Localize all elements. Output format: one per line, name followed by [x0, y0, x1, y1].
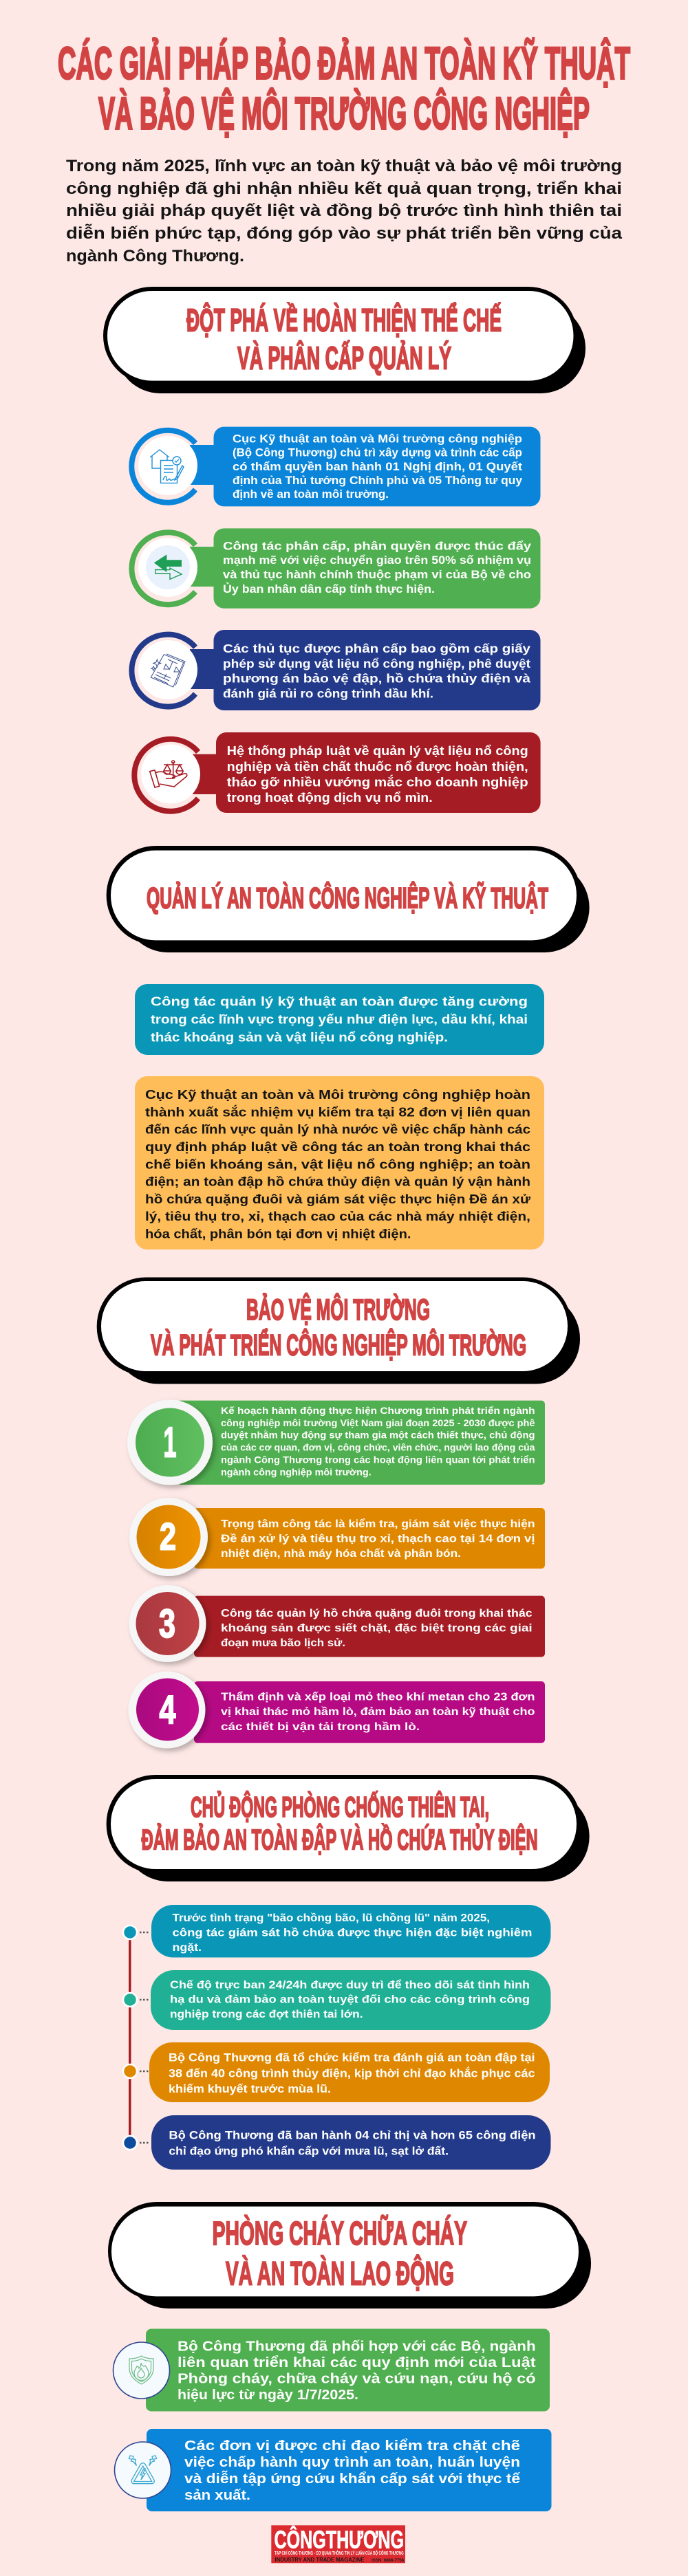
panel: legal drafting card: có thẩm quyền ban hành 01 Nghị định, 01 Quyết — [233, 460, 522, 473]
icon: legal document with scales — [151, 654, 185, 687]
panel: fire law card: Bộ Công Thương đã phối hợp với các Bộ, ngành — [178, 2339, 536, 2355]
panel: explosives law card: Hệ thống pháp luật về quản lý vật liệu nổ công — [227, 744, 528, 758]
panel: timeline item 2: nghiệp trong các đợt thiên tai lớn. — [170, 2009, 363, 2020]
panel: step 2: Đề án xử lý và tiêu thụ tro xỉ, thạch cao tại 14 đơn vị — [221, 1533, 535, 1545]
panel: timeline item 2: hạ du và đảm bảo an toàn tuyệt đối cho các công trình công — [170, 1994, 530, 2006]
icon: house and signed document — [150, 450, 184, 483]
panel: step 1 — [127, 1400, 545, 1485]
panel: drills card: sản xuất. — [184, 2488, 250, 2503]
panel: teal management text — [135, 984, 544, 1055]
intro text block: Trong năm 2025, lĩnh vực an toàn kỹ thuật và bảo vệ môi trường — [66, 157, 622, 175]
panel: timeline item 3: 38 đến 40 công trình thủy điện, kịp thời chỉ đạo khắc phục các — [169, 2066, 535, 2080]
panel: fire law card: hiệu lực từ ngày 1/7/2025. — [178, 2387, 358, 2403]
icon: electric hazard — [129, 2456, 157, 2484]
logo: Công Thương magazine: ISSN: 0866-7756 — [372, 2559, 405, 2563]
logo: Công Thương magazine: CÔNGTHƯƠNG — [274, 2525, 404, 2554]
panel: step 2: nhiệt điện, nhà máy hóa chất và phân bón. — [221, 1548, 461, 1560]
logo: Công Thương magazine: TẠP CHÍ CÔNG THƯƠNG - CƠ QUAN THÔNG TIN LÝ LUẬN CỦA BỘ CÔNG THƯƠNG — [275, 2550, 404, 2556]
panel: teal management text: trong các lĩnh vực trọng yếu như điện lực, dầu khí, khai — [151, 1012, 528, 1026]
section heading: fire safety: PHÒNG CHÁY CHỮA CHÁY — [213, 2214, 467, 2252]
panel: fire law card: Phòng cháy, chữa cháy và cứu nạn, cứu hộ có — [178, 2371, 536, 2387]
panel: delegated procedures card: phép sử dụng vật liệu nổ công nghiệp, phê duyệt — [223, 657, 530, 670]
panel: timeline item 2 — [151, 1970, 550, 2030]
intro text block: ngành Công Thương. — [66, 247, 244, 265]
panel: timeline item 3: khiếm khuyết trước mùa lũ. — [169, 2082, 331, 2095]
logo: Công Thương magazine — [271, 2525, 405, 2563]
panel: step 2: Trọng tâm công tác là kiểm tra, giám sát việc thực hiện — [221, 1518, 535, 1530]
panel: fire law card: liên quan triển khai các quy định mới của Luật — [178, 2355, 536, 2370]
panel: timeline item 1 — [151, 1905, 550, 1957]
section heading: environment — [97, 1278, 580, 1384]
panel: decentralisation card: mạnh mẽ với việc chuyển giao trên 50% số nhiệm vụ — [223, 554, 531, 567]
panel: drills card — [114, 2429, 552, 2511]
panel: decentralisation card — [131, 528, 541, 609]
panel: drills card: và diễn tập ứng cứu khẩn cấp sát với thực tế — [184, 2470, 521, 2487]
panel: step 2 — [129, 1498, 545, 1576]
panel: step 3: đoạn mưa bão lịch sử. — [221, 1637, 345, 1649]
intro text block: công nghiệp đã ghi nhận nhiều kết quả quan trọng, triển khai — [66, 179, 622, 198]
panel: delegated procedures card: phương án bảo vệ đập, hồ chứa thủy điện và — [223, 672, 530, 686]
panel: delegated procedures card: Các thủ tục được phân cấp bao gồm cấp giấy — [223, 642, 530, 655]
timeline rail with markers — [123, 1925, 149, 2150]
logo: Công Thương magazine: INDUSTRY AND TRADE MAGAZINE — [275, 2556, 365, 2563]
panel: legal drafting card — [131, 427, 541, 506]
panel: decentralisation card: Công tác phân cấp, phân quyền được thúc đẩy — [223, 540, 532, 553]
number 1: 1 — [164, 1419, 176, 1466]
panel: timeline item 3: Bộ Công Thương đã tổ chức kiểm tra đánh giá an toàn đập tại — [169, 2051, 535, 2064]
panel: delegated procedures card: đánh giá rủi ro công trình dầu khí. — [223, 686, 433, 700]
panel: step 1: duyệt nhằm huy động sự tham gia một cách thiết thực, chủ động — [221, 1429, 535, 1441]
panel: timeline item 1: Trước tình trạng "bão chồng bão, lũ chồng lũ" năm 2025, — [172, 1912, 490, 1924]
panel: legal drafting card: định về an toàn môi trường. — [233, 488, 389, 501]
panel: drills card: Các đơn vị được chỉ đạo kiểm tra chặt chẽ — [184, 2438, 520, 2454]
section heading: safety management — [107, 846, 590, 952]
panel: orange inspection text: đến các lĩnh vực quản lý nhà nước về việc chấp hành các — [145, 1122, 530, 1137]
intro text block: diễn biến phức tạp, đóng góp vào sự phát triển bền vững của — [66, 223, 623, 243]
icon: exchange arrows — [155, 556, 182, 579]
panel: explosives law card: trong hoạt động dịch vụ nổ mìn. — [227, 791, 433, 805]
section heading: disaster prevention — [107, 1775, 590, 1881]
panel: explosives law card — [134, 732, 541, 813]
panel: step 3: Công tác quản lý hồ chứa quặng đuôi trong khai thác — [221, 1608, 533, 1619]
icon: shield with flame — [129, 2356, 153, 2384]
number 4: 4 — [160, 1688, 176, 1732]
panel: timeline item 4 — [151, 2115, 550, 2170]
panel: step 4: vị khai thác mỏ hầm lò, đảm bảo an toàn kỹ thuật cho — [221, 1706, 535, 1718]
panel: decentralisation card: Ủy ban nhân dân cấp tỉnh thực hiện. — [223, 582, 435, 596]
panel: step 1: của các cơ quan, đơn vị, công chức, viên chức, người lao động của — [221, 1443, 535, 1454]
panel: decentralisation card: và thủ tục hành chính thuộc phạm vi của Bộ về cho — [223, 568, 531, 581]
panel: orange inspection text: Cục Kỹ thuật an toàn và Môi trường công nghiệp hoàn — [145, 1087, 530, 1102]
panel: orange inspection text: hóa chất, phân bón tại đơn vị nhiệt điện. — [145, 1227, 411, 1241]
panel: timeline item 1: ngặt. — [172, 1942, 202, 1954]
panel: timeline item 4: chỉ đạo ứng phó khẩn cấp với mưa lũ, sạt lở đất. — [169, 2144, 449, 2158]
intro text block — [66, 157, 623, 265]
panel: teal management text: thác khoáng sản và vật liệu nổ công nghiệp. — [151, 1031, 448, 1045]
section heading: fire safety: VÀ AN TOÀN LAO ĐỘNG — [226, 2254, 454, 2293]
section heading: fire safety — [108, 2202, 591, 2308]
panel: step 4: các thiết bị vận tải trong hầm lò. — [221, 1721, 420, 1733]
panel: step 4: Thẩm định và xếp loại mỏ theo khí metan cho 23 đơn — [221, 1691, 535, 1703]
section heading: institutions: VÀ PHÂN CẤP QUẢN LÝ — [237, 340, 451, 375]
icon: hand holding scales — [150, 761, 187, 787]
panel: orange inspection text — [135, 1076, 544, 1249]
panel: step 4 — [128, 1671, 545, 1748]
panel: timeline item 2: Chế độ trực ban 24/24h được duy trì để theo dõi sát tình hình — [170, 1978, 530, 1991]
panel: delegated procedures card — [131, 630, 540, 710]
panel: explosives law card: nghiệp và tiền chất thuốc nổ được hoàn thiện, — [227, 760, 528, 774]
panel: step 1: ngành Công Thương trong các hoạt động liên quan tới phát triển — [221, 1454, 535, 1465]
panel: step 3 — [129, 1585, 545, 1662]
panel: orange inspection text: hồ chứa quặng đuôi và giám sát việc thực hiện Đề án xử — [145, 1192, 531, 1206]
panel: legal drafting card: Cục Kỹ thuật an toàn và Môi trường công nghiệp — [233, 432, 522, 446]
panel: orange inspection text: điện; an toàn đập hồ chứa thủy điện và quản lý vận hành — [145, 1175, 530, 1189]
panel: legal drafting card: định của Thủ tướng Chính phủ và 05 Thông tư quy — [233, 474, 523, 487]
section heading: environment: BẢO VỆ MÔI TRƯỜNG — [246, 1293, 430, 1327]
panel: timeline item 4: Bộ Công Thương đã ban hành 04 chỉ thị và hơn 65 công điện — [169, 2129, 536, 2142]
panel: explosives law card: tháo gỡ nhiều vướng mắc cho doanh nghiệp — [227, 774, 528, 789]
panel: fire law card — [113, 2328, 550, 2411]
panel: step 1: công nghiệp môi trường Việt Nam giai đoạn 2025 - 2030 được phê — [221, 1418, 535, 1429]
panel: step 1: ngành công nghiệp môi trường. — [221, 1467, 372, 1478]
title — [58, 37, 630, 139]
panel: drills card: việc chấp hành quy trình an toàn, huấn luyện — [184, 2455, 520, 2470]
panel: step 3: khoáng sản được siết chặt, đặc biệt trong các giai — [221, 1622, 533, 1634]
panel: step 1: Kế hoạch hành động thực hiện Chương trình phát triển ngành — [221, 1406, 535, 1417]
number 2: 2 — [160, 1514, 176, 1558]
intro text block: nhiều giải pháp quyết liệt và đồng bộ trước tình hình thiên tai — [66, 201, 622, 220]
panel: teal management text: Công tác quản lý kỹ thuật an toàn được tăng cường — [151, 994, 528, 1008]
panel: orange inspection text: thành xuất sắc nhiệm vụ kiểm tra tại 82 đơn vị liên quan — [145, 1105, 530, 1120]
number 3: 3 — [159, 1602, 175, 1646]
panel: timeline item 1: công tác giám sát hồ chứa được thực hiện đặc biệt nghiêm — [172, 1927, 533, 1939]
section heading: institutions — [103, 287, 585, 393]
panel: orange inspection text: quy định pháp luật về công tác an toàn trong khai thác — [145, 1139, 530, 1154]
panel: timeline item 3 — [149, 2042, 550, 2102]
panel: legal drafting card: (Bộ Công Thương) chủ trì xây dựng và trình các cấp — [233, 446, 522, 459]
panel: orange inspection text: chế biến khoáng sản, vật liệu nổ công nghiệp; an toàn — [145, 1157, 530, 1172]
panel: orange inspection text: lý, tiêu thụ tro, xỉ, thạch cao của các nhà máy nhiệt điện, — [145, 1209, 530, 1223]
